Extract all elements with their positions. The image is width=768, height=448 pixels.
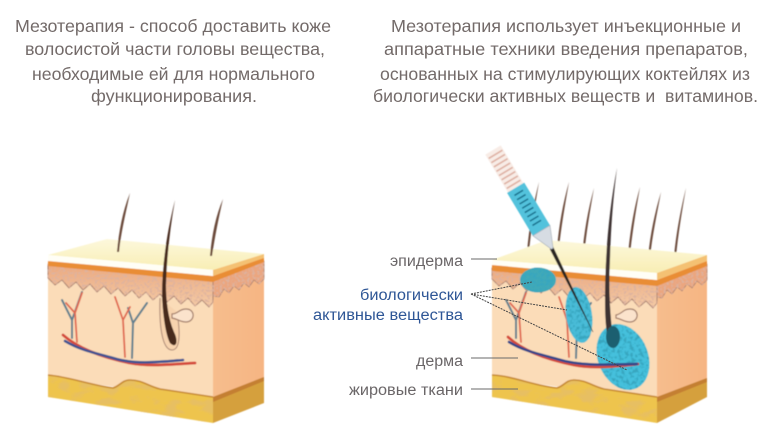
heading: right paragraph: аппаратные техники введения препаратов, <box>384 39 748 59</box>
label: active substances: активные вещества <box>313 307 463 324</box>
top surface <box>492 240 707 273</box>
heading: right paragraph: биологически активных веществ и витаминов. <box>373 86 758 106</box>
heading: right paragraph: Мезотерапия использует инъекционные и <box>391 16 741 36</box>
heading: left paragraph <box>15 16 331 106</box>
epidermis layer <box>48 264 213 307</box>
fat layer front <box>492 375 657 423</box>
epidermis side layer <box>213 261 264 297</box>
heading: left paragraph: функционирования. <box>91 86 257 106</box>
heading: left paragraph: необходимые ей для нормального <box>32 64 315 84</box>
fat layer side <box>213 377 264 423</box>
dermis front <box>492 265 657 400</box>
heading: left paragraph: Мезотерапия - способ доставить коже <box>15 16 331 36</box>
follicle <box>160 298 179 350</box>
main hair <box>605 168 617 342</box>
white band <box>492 260 657 280</box>
label: epidermis: эпидерма <box>390 253 463 270</box>
hairs <box>527 182 686 258</box>
fat layer front <box>48 375 213 423</box>
hairs <box>117 193 130 252</box>
fat layer side <box>657 378 707 423</box>
blood vessels: branches <box>506 292 591 358</box>
label: active substances <box>313 287 463 324</box>
injection needle <box>550 247 593 332</box>
label: dermis: дерма <box>416 353 463 370</box>
orange horny layer <box>492 261 707 286</box>
plunger <box>485 145 524 194</box>
white band <box>48 255 213 276</box>
epidermis side layer <box>657 264 707 298</box>
main hair <box>162 200 177 345</box>
dermis side <box>213 257 264 400</box>
label: active substances: биологически <box>360 287 463 304</box>
heading: right paragraph <box>373 16 758 106</box>
illustration: skin block with mesotherapy injection <box>484 145 707 423</box>
dermis side <box>657 260 707 400</box>
epidermis layer <box>492 268 657 308</box>
leader lines <box>471 259 627 389</box>
labels and leader lines <box>313 253 627 399</box>
active substance depot: follicle <box>587 316 659 398</box>
follicle bulb <box>606 326 620 348</box>
blood vessels: main <box>508 337 638 367</box>
illustration: skin block without treatment <box>48 193 264 423</box>
orange horny layer <box>48 257 264 282</box>
heading: left paragraph: волосистой части головы вещества, <box>25 39 325 59</box>
barrel with solution <box>507 183 550 236</box>
blood vessels <box>62 292 195 365</box>
syringe <box>484 145 561 254</box>
sebaceous gland <box>616 309 637 322</box>
active substance depot: epidermis <box>520 268 556 292</box>
hub <box>533 225 561 254</box>
active substance depot: dermis <box>562 285 596 345</box>
label: fat tissue: жировые ткани <box>349 382 463 399</box>
top surface <box>48 239 264 270</box>
heading: right paragraph: основанных на стимулирующих коктейлях из <box>380 64 750 84</box>
dermis front <box>48 260 213 400</box>
sebaceous gland <box>172 309 193 322</box>
